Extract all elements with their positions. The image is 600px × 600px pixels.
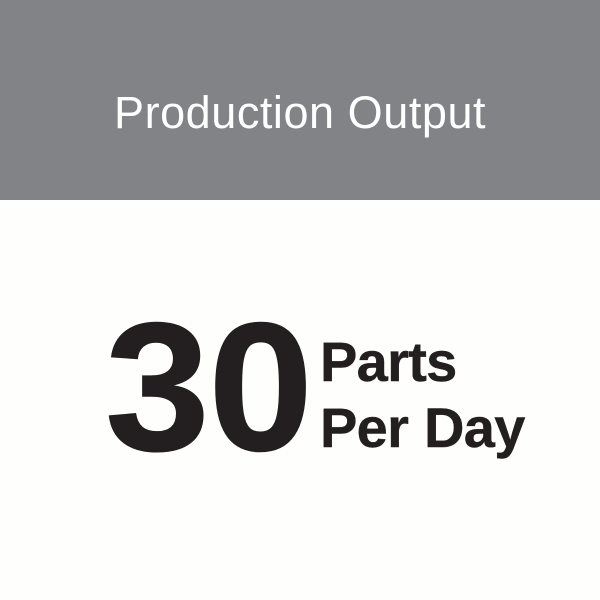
label: Parts Per Day: Per Day [320,396,525,459]
label: Parts Per Day [320,330,526,459]
heading: Production Output: Production Output [114,87,486,138]
big number: 30: 30 [105,284,312,488]
header panel [0,0,600,200]
label: Parts Per Day: Parts [320,330,457,393]
